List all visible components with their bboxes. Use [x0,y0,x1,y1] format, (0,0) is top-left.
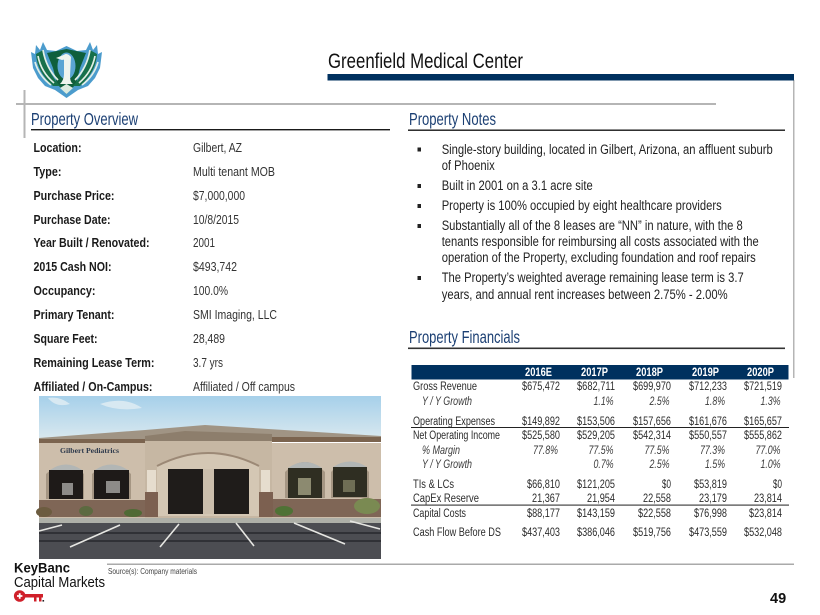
page number: 49 [770,591,786,607]
table: financials: $157,656 [633,416,671,428]
table: financials: $0 [662,479,671,491]
table: financials: 2017P [581,367,608,379]
overview rows: 2001 [193,236,215,250]
overview rows: Affiliated / Off campus [193,380,295,394]
table: financials: 2018P [636,367,663,379]
table: financials: 23,179 [699,493,727,505]
notes text: Substantially all of the 8 leases are “NN” in nature, with the 8 [442,218,743,233]
bullets [418,148,421,280]
overview rows: Year Built / Renovated: [34,236,150,250]
table: financials: 77.8% [533,445,558,457]
table: financials: Capital Costs [413,508,466,520]
table: financials: 2020P [747,367,774,379]
source note: Source(s): Company materials [108,566,197,576]
logo: Greenfield pelican crest [31,42,102,98]
overview rows: Affiliated / On-Campus: [34,380,152,394]
table: financials: $153,506 [577,416,615,428]
table: financials: $0 [773,479,782,491]
table: financials: 0.7% [594,459,614,471]
table: financials: TIs & LCs [413,479,454,491]
overview rows [34,141,295,394]
table: financials: 2.5% [649,396,670,408]
table: financials: 1.5% [705,459,725,471]
table: financials: Y / Y Growth [422,396,472,408]
overview rows: Primary Tenant: [34,308,114,322]
photo: medical building [36,396,381,559]
overview rows: Purchase Date: [34,213,110,227]
table: financials: $529,205 [577,430,615,442]
table: financials: $121,205 [577,479,615,491]
notes text: Built in 2001 on a 3.1 acre site [442,178,593,193]
table: financials: 77.3% [700,445,725,457]
table: financials: $525,580 [522,430,560,442]
notes text [442,142,773,302]
overview rows: SMI Imaging, LLC [193,308,277,322]
table: financials: 1.0% [760,459,780,471]
panel: property financials [408,327,789,539]
icon: red key [14,590,44,602]
overview rows: Purchase Price: [34,189,114,203]
logo: KeyBanc Capital Markets: Capital Markets [14,575,105,591]
table: financials: 77.5% [588,445,614,457]
overview rows: $493,742 [193,260,237,274]
table: financials: $555,862 [744,430,782,442]
title [328,50,794,80]
table: financials: $66,810 [527,479,560,491]
table: financials: $712,233 [689,381,727,393]
table: financials: Operating Expenses [413,416,495,428]
table: financials: 1.3% [760,396,780,408]
table: financials: $542,314 [633,430,671,442]
notes text: of Phoenix [442,158,495,173]
page frame lines [16,80,794,565]
table: financials: 2.5% [649,459,670,471]
notes text: years, and annual rent increases between 2.75% - 2.00% [442,287,728,302]
title: Greenfield Medical Center [328,50,523,73]
notes text: tenants responsible for reimbursing all costs associated with the [442,234,759,249]
table: financials: $550,557 [689,430,727,442]
logo: KeyBanc Capital Markets: KeyBanc [14,560,70,576]
table: financials: Net Operating Income [413,430,500,442]
table: financials: $88,177 [527,508,560,520]
overview rows: Location: [34,141,82,155]
table: financials: Cash Flow Before DS [413,527,501,539]
overview rows: 2015 Cash NOI: [34,260,112,274]
notes text: Property is 100% occupied by eight healthcare providers [442,198,722,213]
heading: property notes: Property Notes [409,109,496,129]
table: financials: $23,814 [749,508,782,520]
table: financials: $532,048 [744,527,782,539]
notes text: operation of the Property, excluding foundation and roof repairs [442,250,756,265]
table: financials: 2019P [692,367,719,379]
table: financials: % Margin [422,445,460,457]
table: financials: 77.0% [756,445,780,457]
table: financials: 77.5% [644,445,670,457]
overview rows: 28,489 [193,332,225,346]
table: financials: $22,558 [638,508,671,520]
building sign text: Gilbert Pediatrics [60,446,119,455]
overview rows: Type: [34,165,62,179]
table: financials: CapEx Reserve [413,493,479,505]
notes text: The Property’s weighted average remaining lease term is 3.7 [442,270,744,285]
overview rows: Remaining Lease Term: [34,356,154,370]
overview rows: 100.0% [193,284,228,298]
overview rows: 10/8/2015 [193,213,239,227]
overview rows: Occupancy: [34,284,96,298]
table: financials: $386,046 [577,527,615,539]
table: financials: 22,558 [643,493,671,505]
table: financials: $721,519 [744,381,782,393]
table: financials: $437,403 [522,527,560,539]
table: financials: Y / Y Growth [422,459,472,471]
table: financials: $473,559 [689,527,727,539]
table: financials: $165,657 [744,416,782,428]
logo: KeyBanc Capital Markets [14,560,105,602]
table: financials: $149,892 [522,416,560,428]
table: financials: $143,159 [577,508,615,520]
overview rows: Gilbert, AZ [193,141,242,155]
table: financials: $76,998 [694,508,727,520]
table: financials: Gross Revenue [413,381,477,393]
heading: property financials: Property Financials [409,327,520,347]
overview rows: 3.7 yrs [193,356,223,370]
overview rows: $7,000,000 [193,189,245,203]
table: financials [411,365,789,539]
table: financials: 1.1% [594,396,614,408]
panel: property overview [31,109,390,394]
table: financials: 21,954 [587,493,615,505]
overview rows: Square Feet: [34,332,98,346]
heading: property overview: Property Overview [31,109,138,129]
table: financials: 23,814 [754,493,782,505]
table: financials: $53,819 [694,479,727,491]
table: financials: $675,472 [522,381,560,393]
table: financials: 2016E [525,367,552,379]
table: financials: 21,367 [532,493,560,505]
table: financials: $519,756 [633,527,671,539]
table: financials: 1.8% [705,396,725,408]
overview rows: Multi tenant MOB [193,165,275,179]
table: financials: $161,676 [689,416,727,428]
table: financials: $699,970 [633,381,671,393]
panel: property notes [408,109,785,302]
table: financials: $682,711 [577,381,615,393]
